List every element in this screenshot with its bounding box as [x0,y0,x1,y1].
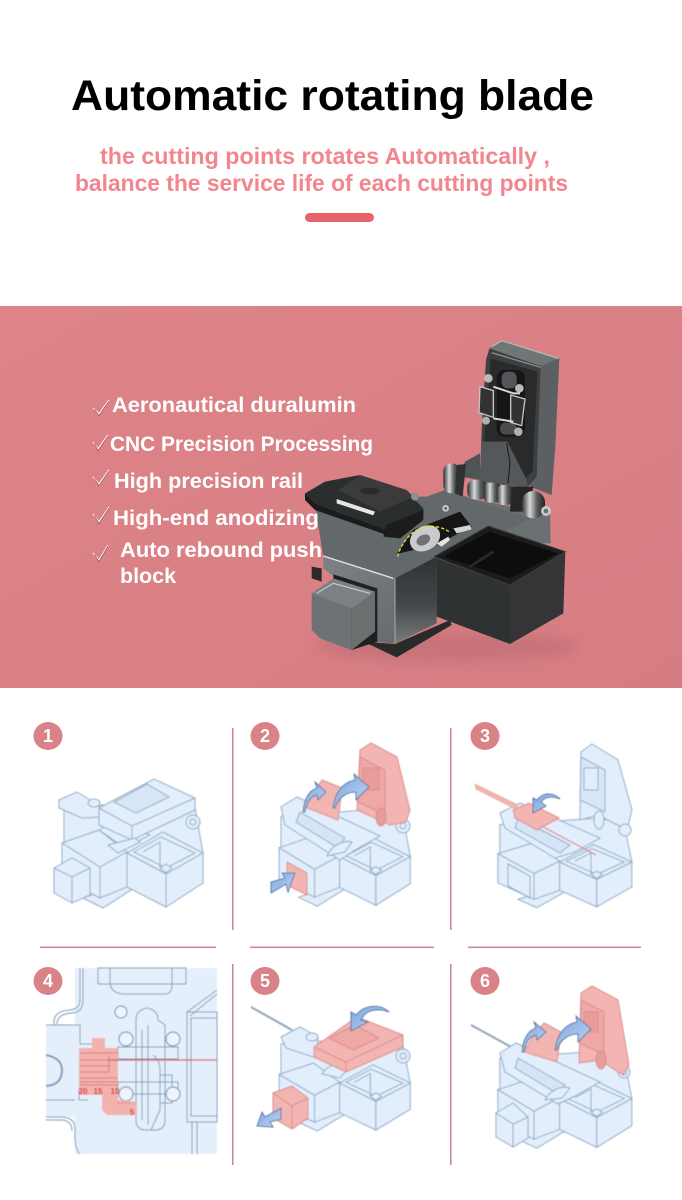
arrow: open clamp [303,782,326,812]
scale numbers: 10 [111,1087,120,1096]
feature: high-end anodizing: High-end anodizing [113,507,319,530]
subtitle [75,143,568,196]
fibre [251,1007,292,1030]
body front face [395,557,437,643]
arrow: lift lever [555,1016,591,1050]
panel: features band [0,306,682,688]
arrow: close lid [351,1006,389,1031]
feature: auto rebound push block [93,539,322,588]
machine body [498,1051,632,1148]
deck mechanism [281,797,410,860]
pink lever [579,986,629,1075]
feature: auto rebound push block: Auto rebound push [120,539,322,562]
recess outline [508,864,530,898]
arrow: open clamp [522,1022,546,1052]
step number 2: 2 [260,726,270,746]
step number 4 [34,967,62,995]
clamp left [281,1027,410,1078]
scale numbers: 5 [130,1108,135,1117]
base plate [363,620,452,657]
body right rear [467,500,551,543]
waste bin [437,558,510,644]
feature list [93,394,373,588]
arrow: lift lever [333,774,369,808]
pink lever [357,743,410,826]
feature: auto rebound push block: block [120,565,176,588]
panel: step 4 detail [46,968,217,1154]
step number 1 [34,722,62,750]
subtitle: the cutting points rotates Automatically , [100,143,550,169]
pink push block [273,1086,308,1129]
black clamp [305,475,423,530]
push block [333,574,377,650]
pink push block recess [287,862,307,895]
push block [54,858,90,903]
step number 4: 4 [43,971,53,991]
deck mechanism [500,1043,630,1104]
machine body [279,809,410,906]
step number 1: 1 [43,726,53,746]
arrow: press block [271,873,295,893]
machine, closed [59,779,203,908]
blade opening [397,512,472,554]
arrow: release block [257,1108,281,1127]
step number 5 [250,967,280,995]
detail background [46,968,217,1154]
step number 5: 5 [260,971,270,991]
pink clamp [513,803,559,830]
step number 6: 6 [480,971,490,991]
feature: aeronautical duralumin: Aeronautical duralumin [112,394,356,417]
scale numbers [79,1087,135,1117]
accent pill [305,213,374,222]
scale numbers: 20 [79,1087,88,1096]
title: Automatic rotating blade [71,72,594,120]
panel: step 1 [54,779,203,908]
step number 3 [470,722,500,750]
pink clamp [305,780,342,820]
step number 6 [470,967,500,995]
push block [496,1103,528,1147]
feature: CNC precision processing: CNC Precision Processing [110,433,373,456]
screws [115,1006,180,1101]
panel: step 5 [251,1006,410,1131]
outlines [46,968,217,1154]
body left face [323,557,395,643]
hinge barrels [443,463,551,518]
step number 2 [250,722,280,750]
pink lid [314,1017,403,1072]
feature: high precision rail: High precision rail [114,470,303,493]
red fibre line [108,1059,217,1061]
lever, open [500,744,632,858]
pink fibre [475,784,596,855]
upright lid [460,340,559,495]
panel: step 6 [471,986,632,1148]
panel: step 3 [475,744,632,908]
panel: step 2 [271,743,410,906]
body top face [315,489,532,578]
band background [0,306,682,688]
step number 3: 3 [480,726,490,746]
pink scale plate [79,1038,137,1117]
product: fibre cleaver device [305,340,580,662]
subtitle: balance the service life of each cutting points [75,170,568,196]
machine body [279,1037,410,1131]
fibre [471,1025,513,1048]
machine body [498,818,632,908]
pink clamp [524,1023,561,1062]
arrow: close clamp [533,794,560,813]
scale numbers: 15 [94,1087,103,1096]
